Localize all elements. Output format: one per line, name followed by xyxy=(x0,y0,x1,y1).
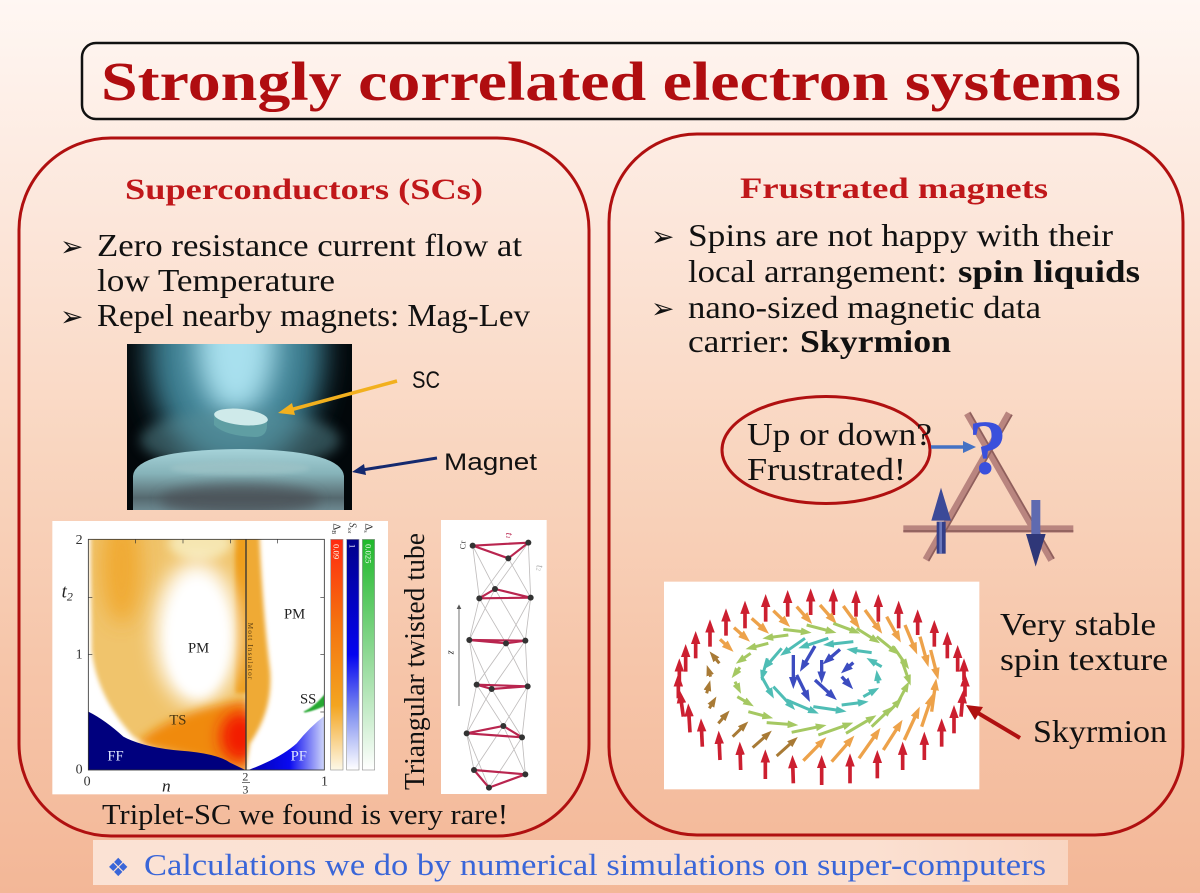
label: very stable spin texture: spin texture xyxy=(1000,641,1168,677)
diagram: triangular twisted tube lattice: t 1 xyxy=(503,533,514,538)
bullet list: frustrated magnet properties: nano-sized magnetic data xyxy=(688,289,1041,325)
panel: superconductors xyxy=(19,138,589,836)
skyrmion spin texture xyxy=(664,582,979,789)
phase region labels: FF xyxy=(107,749,124,765)
bullet list: frustrated magnet properties: local arrangement: xyxy=(688,253,947,289)
bullet list: frustrated magnet properties: Spins are not happy with their xyxy=(688,217,1113,253)
phase region labels: PM xyxy=(188,640,209,656)
axis labels: 0 xyxy=(76,762,83,777)
colour bars xyxy=(330,523,375,770)
axis labels xyxy=(62,533,328,796)
footer banner: ❖ xyxy=(107,853,129,882)
axis labels: 2 xyxy=(67,590,73,604)
bullet list: superconductor properties: low Temperature xyxy=(97,262,335,298)
blue core spins xyxy=(793,646,853,696)
axis labels: 2 xyxy=(242,770,248,784)
bullet list: frustrated magnet properties xyxy=(651,217,1140,359)
colour bars: tot xyxy=(346,528,352,534)
bullet list: superconductor properties: ➢ xyxy=(60,230,83,263)
axis labels: 2 xyxy=(76,533,83,548)
callout: up or down: Up or down? xyxy=(747,416,932,452)
colour bars: 1 xyxy=(348,544,358,548)
caption: triplet SC: Triplet-SC we found is very rare! xyxy=(102,799,508,831)
bullet list: frustrated magnet properties: spin liquids xyxy=(958,253,1140,289)
axis labels: n xyxy=(162,776,171,795)
title: Strongly correlated electron systems xyxy=(101,51,1121,112)
arrow: magnet pointer xyxy=(352,458,437,475)
icon: frustrated triangle with spins: ? xyxy=(968,404,1007,490)
phase region labels: PF xyxy=(291,749,307,765)
diagram: triangular twisted tube lattice xyxy=(441,520,547,794)
label: Skyrmion: Skyrmion xyxy=(1033,713,1167,749)
bullet list: frustrated magnet properties: Skyrmion xyxy=(800,323,951,359)
diagram: triangular twisted tube lattice: Cr xyxy=(457,541,467,549)
photo: levitating superconductor over magnet xyxy=(127,344,352,510)
bullet list: superconductor properties xyxy=(60,227,530,333)
bullet list: superconductor properties: Zero resistance current flow at xyxy=(97,227,522,263)
arrow: SC pointer xyxy=(278,381,397,415)
bullet list: frustrated magnet properties: ➢ xyxy=(651,292,674,325)
arrow: skyrmion pointer xyxy=(966,705,1020,738)
teal ring spins xyxy=(762,638,882,711)
label: triangular twisted tube: Triangular twisted tube xyxy=(399,533,431,790)
phase region labels: TS xyxy=(169,713,186,729)
brown ring spins xyxy=(707,656,793,756)
panel: frustrated magnets xyxy=(609,134,1183,835)
title xyxy=(82,43,1138,119)
arrow: callout to triangle xyxy=(931,441,976,453)
colour bars: S xyxy=(346,523,357,528)
phase region labels: Mott Insulator xyxy=(246,623,255,680)
bullet list: frustrated magnet properties: ➢ xyxy=(651,220,674,253)
bullet list: superconductor properties: ➢ xyxy=(60,300,83,333)
outer red spins xyxy=(678,596,965,785)
label: very stable spin texture xyxy=(1000,606,1168,677)
colour bars: Δ xyxy=(362,523,373,530)
green ring spins xyxy=(735,623,909,735)
heading: frustrated magnets: Frustrated magnets xyxy=(740,172,1048,205)
colour bars: 0.09 xyxy=(332,544,342,559)
axis labels: 1 xyxy=(321,774,328,789)
bullet list: superconductor properties: Repel nearby magnets: Mag-Lev xyxy=(97,297,530,333)
colour bars: 0.025 xyxy=(363,544,373,563)
label: SC: SC xyxy=(412,367,440,394)
colour bars: Δ xyxy=(330,523,341,530)
callout: up or down: Frustrated! xyxy=(747,451,906,487)
diagram: triangular twisted tube lattice: t 2 xyxy=(534,565,545,571)
axis labels: 0 xyxy=(84,774,91,789)
footer banner xyxy=(93,840,1068,885)
colour bars: B xyxy=(330,530,336,534)
orange ring spins xyxy=(720,605,937,762)
phase region labels: SS xyxy=(300,691,316,707)
icon: frustrated triangle with spins xyxy=(903,404,1073,567)
bullet list: frustrated magnet properties: carrier: xyxy=(688,323,790,359)
axis labels: 3 xyxy=(242,782,248,796)
axis labels: t xyxy=(62,581,67,602)
callout: up or down xyxy=(722,396,932,504)
label: very stable spin texture: Very stable xyxy=(1000,606,1156,642)
phase region labels xyxy=(107,607,316,765)
footer banner: Calculations we do by numerical simulations on super-computers xyxy=(144,847,1046,882)
label: Magnet: Magnet xyxy=(444,449,537,476)
axis labels: 1 xyxy=(76,648,83,663)
diagram: triangular twisted tube lattice: z xyxy=(445,650,456,655)
heading: superconductors: Superconductors (SCs) xyxy=(125,173,483,206)
colour bars: s xyxy=(362,530,368,533)
phase region labels: PM xyxy=(284,607,305,623)
phase diagram xyxy=(52,510,388,796)
